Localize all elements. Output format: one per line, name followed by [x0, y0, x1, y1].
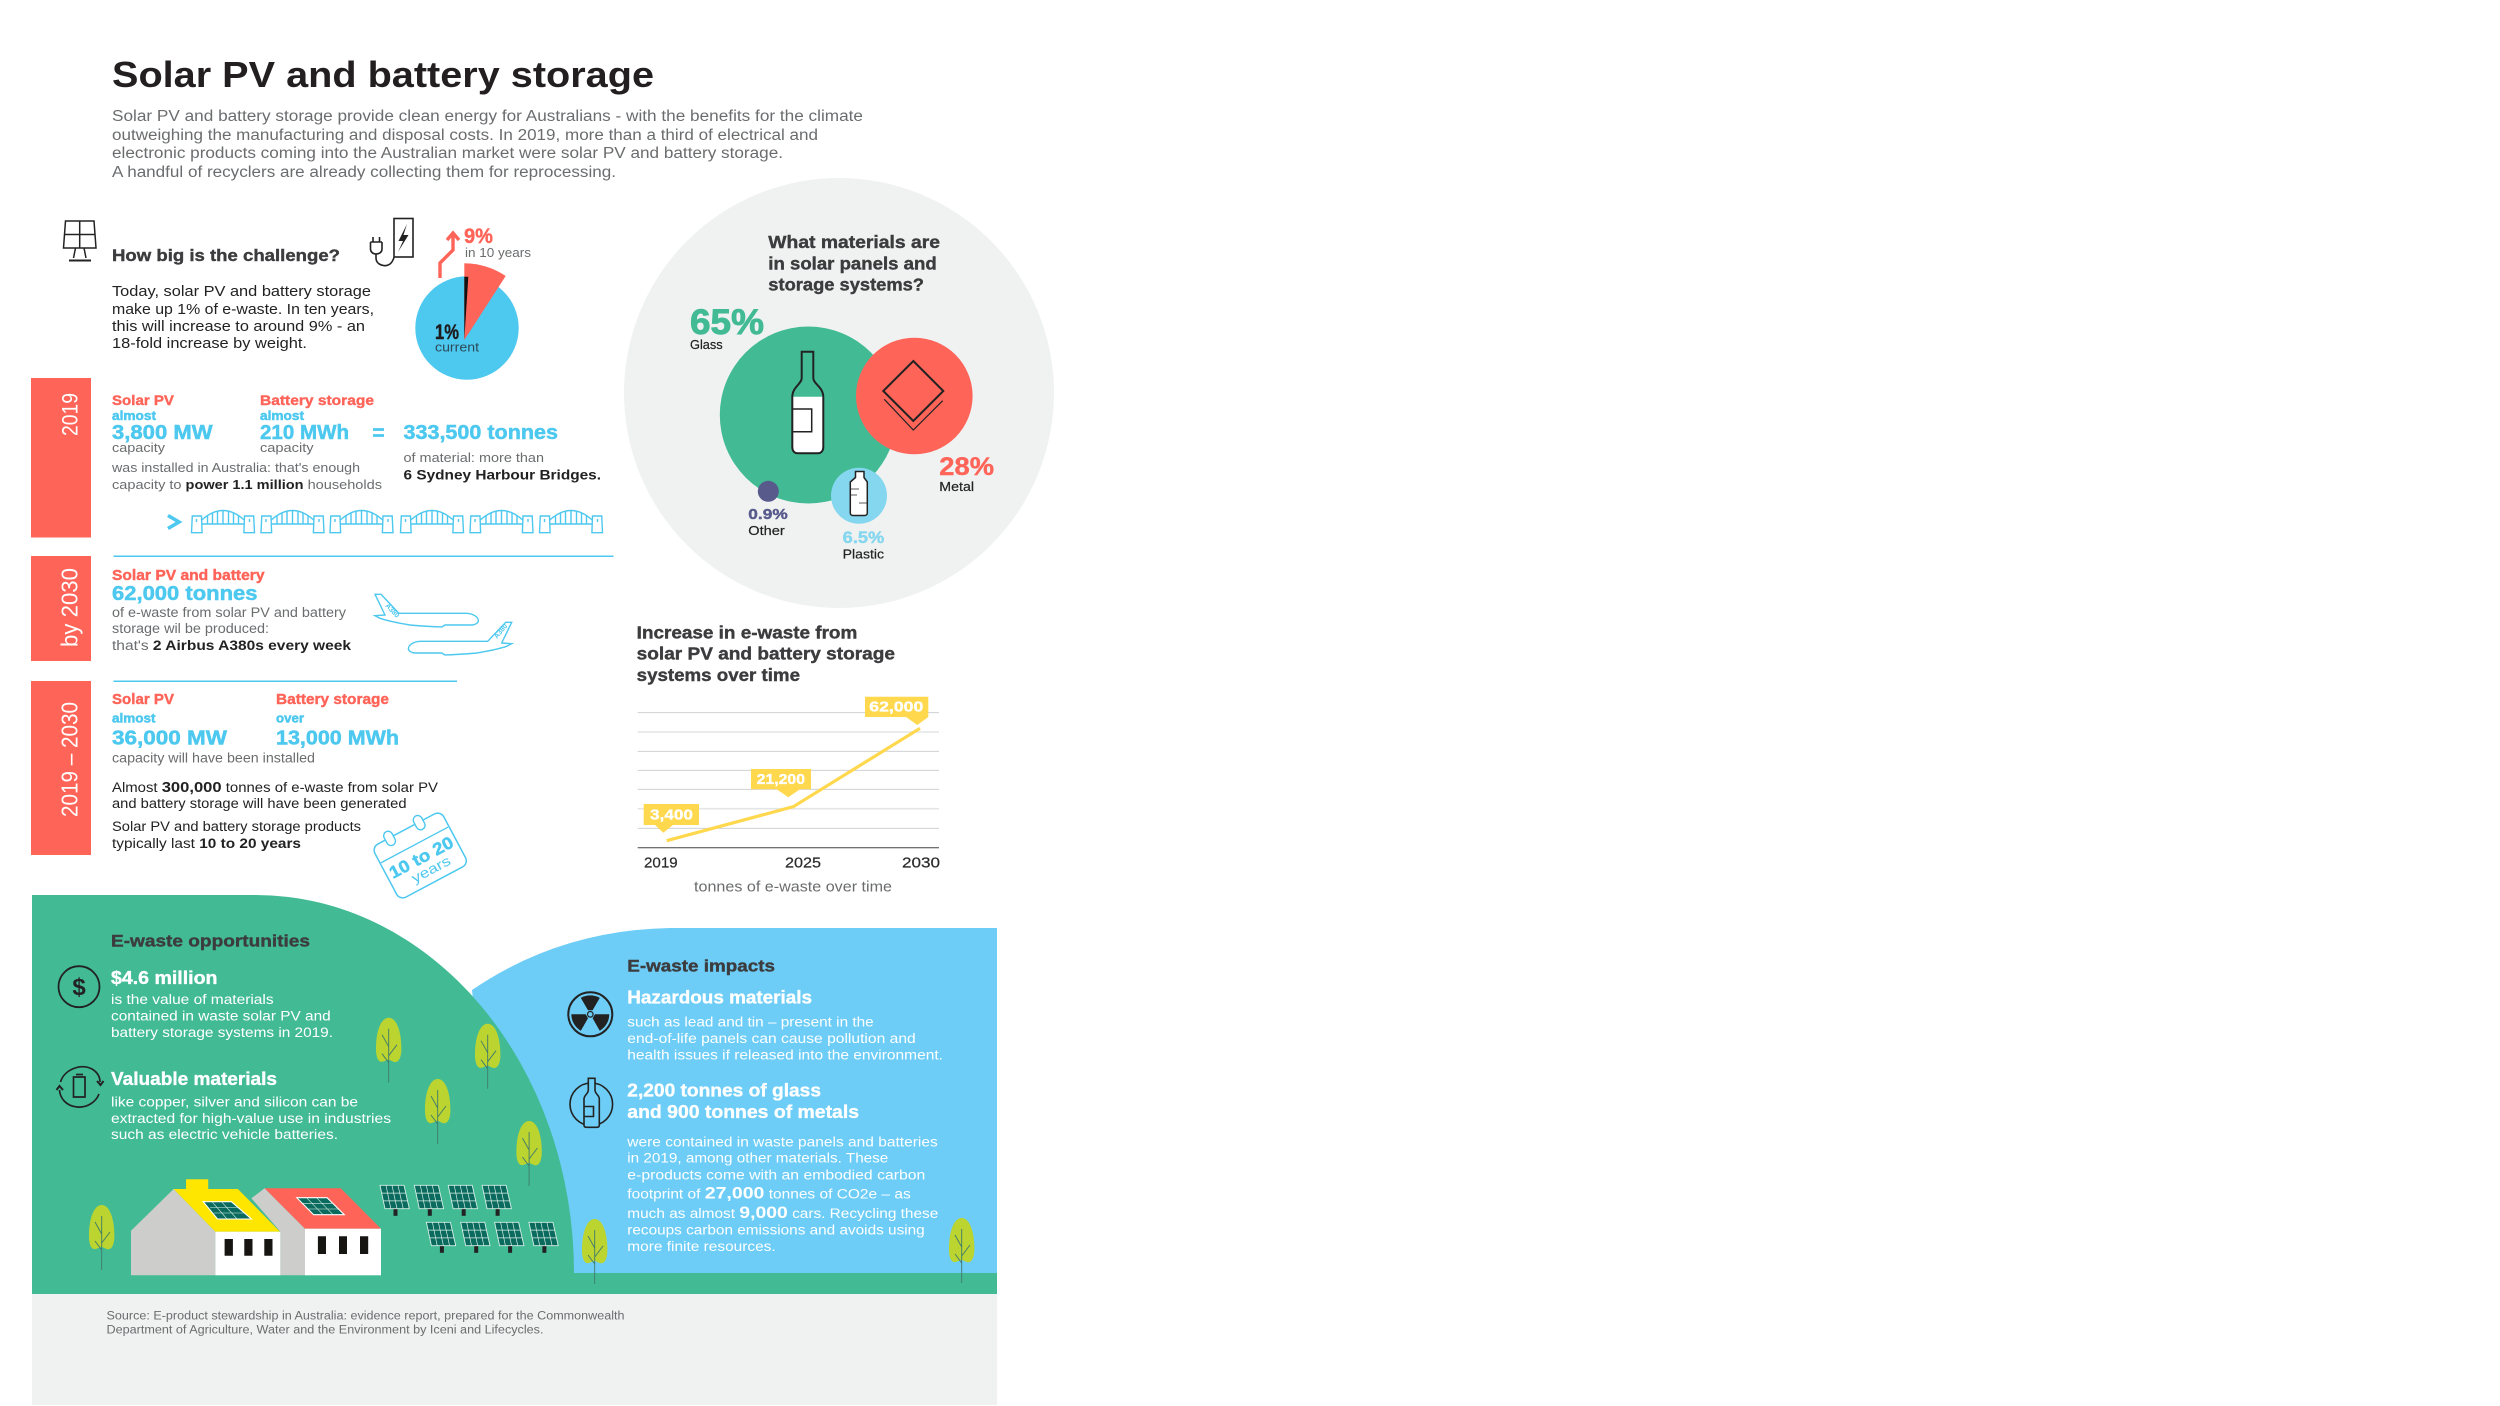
- heading: what materials: storage systems?: [768, 275, 924, 295]
- battery storage 2019 stats: almost: [260, 408, 305, 423]
- e-waste generated note: Almost 300,000 tonnes of e-waste from solar PV: [112, 779, 438, 796]
- battery storage 2019-2030 stats: 13,000 MWh: [276, 728, 399, 750]
- x axis caption: tonnes of e-waste over time: [694, 880, 892, 896]
- year tab: 2019: 2019: [58, 393, 82, 436]
- icon: recycle battery: [56, 1067, 104, 1107]
- panel: materials: [624, 178, 1054, 608]
- hazardous materials text: end-of-life panels can cause pollution and: [627, 1031, 916, 1046]
- total tonnes 2019: [404, 422, 601, 483]
- e-waste generated note: [112, 779, 438, 811]
- solar PV 2019-2030 stats: 36,000 MW: [112, 728, 227, 750]
- label: 9% in 10 years: in 10 years: [465, 245, 532, 260]
- icon: plug and battery: [370, 218, 413, 266]
- total tonnes 2019: 6 Sydney Harbour Bridges.: [404, 467, 601, 483]
- trees: [89, 1018, 974, 1284]
- solar PV 2019-2030 stats: Solar PV: [112, 692, 174, 708]
- plastic circle with bottle: [831, 468, 887, 524]
- valuable materials text: extracted for high-value use in industries: [111, 1111, 391, 1126]
- heading: e-waste opportunities: E-waste opportunities: [111, 932, 310, 951]
- pie chart: 1% current and 9% in 10 years: 1%: [435, 321, 459, 344]
- label: 28% metal: 28%: [939, 453, 994, 481]
- heading: how big is the challenge: How big is the challenge?: [112, 246, 340, 265]
- heading: what materials: What materials are: [768, 232, 940, 252]
- total tonnes 2019: of material: more than: [404, 450, 544, 465]
- year tab: by 2030: [31, 556, 91, 661]
- installation note: capacity to power 1.1 million households: [112, 477, 383, 492]
- other circle: [758, 481, 779, 502]
- battery storage 2019 stats: capacity: [260, 440, 314, 455]
- x axis labels: 2025: [785, 855, 821, 871]
- by 2030 stats: 62,000 tonnes: [112, 583, 258, 605]
- icon: two Airbus A380 planes: [375, 594, 512, 655]
- label: 6.5% plastic: [843, 528, 885, 562]
- label: 0.9% other: 0.9%: [748, 506, 788, 523]
- battery storage 2019-2030 stats: over: [276, 711, 304, 726]
- glass and metals text: recoups carbon emissions and avoids using: [627, 1223, 925, 1238]
- callout: 3,400: 3,400: [650, 806, 693, 823]
- battery storage 2019 stats: 210 MWh: [260, 422, 349, 444]
- source text: Source: E-product stewardship in Australia: evidence report, prepared for the Commonwealth: [106, 1310, 624, 1322]
- by 2030 stats: of e-waste from solar PV and battery: [112, 605, 346, 620]
- label: 28% metal: Metal: [939, 479, 974, 494]
- icon: two Airbus A380 planes: A380: [384, 603, 400, 620]
- metal circle with sheets icon: [856, 338, 973, 454]
- icon: radiation hazard: [568, 992, 612, 1036]
- icon: solar panel: [64, 221, 96, 260]
- by 2030 stats: Solar PV and battery: [112, 568, 264, 584]
- glass and metals text: much as almost 9,000 cars. Recycling these: [627, 1203, 938, 1222]
- glass and metals text: in 2019, among other materials. These: [627, 1151, 888, 1166]
- callout: 62,000: 62,000: [869, 699, 923, 716]
- title: Solar PV and battery storage: [112, 54, 654, 95]
- icon: two Airbus A380 planes: A380: [493, 623, 509, 640]
- callout: 21,200: 21,200: [757, 771, 805, 788]
- panel: by 2030: [31, 556, 512, 661]
- label: 9% in 10 years: 9%: [464, 225, 493, 248]
- value of materials text: battery storage systems in 2019.: [111, 1025, 333, 1040]
- arrow: increase: [440, 233, 459, 278]
- solar PV 2019 stats: Solar PV: [112, 392, 175, 408]
- challenge description: 18-fold increase by weight.: [112, 336, 307, 352]
- source text: Department of Agriculture, Water and the Environment by Iceni and Lifecycles.: [106, 1324, 544, 1336]
- panel: line chart: [637, 622, 940, 896]
- icon: calendar 10 to 20 years: [368, 805, 469, 900]
- solar PV 2019 stats: capacity: [112, 440, 166, 455]
- intro text block: Solar PV and battery storage provide clean energy for Australians - with the benefits for the climate: [112, 108, 863, 125]
- product lifetime note: typically last 10 to 20 years: [112, 836, 301, 851]
- icon: dollar: [58, 966, 100, 1007]
- data line: [667, 728, 920, 841]
- solar PV 2019 stats: 3,800 MW: [112, 422, 213, 444]
- challenge description: [112, 284, 374, 352]
- label: 0.9% other: [748, 506, 788, 538]
- glass and metals text: and 900 tonnes of metals: [627, 1102, 859, 1122]
- total tonnes 2019: 333,500 tonnes: [404, 422, 558, 444]
- hazardous materials text: health issues if released into the environment.: [627, 1047, 943, 1062]
- panel: 2019 to 2030: [31, 681, 469, 900]
- challenge description: this will increase to around 9% - an: [112, 319, 365, 335]
- intro text block: outweighing the manufacturing and disposal costs. In 2019, more than a third of electrical and: [112, 127, 818, 144]
- label: 6.5% plastic: 6.5%: [843, 528, 884, 547]
- panel: source footer: [32, 1294, 997, 1405]
- glass and metals text: more finite resources.: [627, 1239, 776, 1254]
- panel: 2019: [31, 378, 602, 538]
- intro text block: A handful of recyclers are already collecting them for reprocessing.: [112, 164, 616, 181]
- label: 28% metal: [939, 453, 994, 494]
- battery storage 2019 stats: Battery storage: [260, 392, 374, 408]
- label: 0.9% other: Other: [748, 523, 785, 538]
- heading: what materials: [768, 232, 940, 295]
- value of materials text: is the value of materials: [111, 992, 274, 1007]
- product lifetime note: [112, 819, 361, 851]
- value of materials text: contained in waste solar PV and: [111, 1009, 331, 1024]
- blue background: [472, 928, 997, 1273]
- icon: dollar: $: [72, 974, 86, 1001]
- heading: increase in e-waste: systems over time: [637, 665, 800, 685]
- background circle: [624, 178, 1054, 608]
- valuable materials text: such as electric vehicle batteries.: [111, 1127, 338, 1142]
- panel: how big is the challenge: [64, 218, 532, 380]
- solar PV 2019 stats: [112, 392, 213, 455]
- green background: [32, 895, 997, 1294]
- solar PV 2019-2030 stats: [112, 692, 227, 750]
- icon: bottle in circle: [570, 1078, 613, 1127]
- value of materials text: [111, 968, 333, 1040]
- ground solar panels: [380, 1185, 558, 1253]
- glass and metals text: e-products come with an embodied carbon: [627, 1167, 925, 1182]
- icon: calendar 10 to 20 years: 10 to 20: [386, 833, 457, 883]
- capacity note: capacity will have been installed: [112, 751, 315, 766]
- label: 65% glass: 65%: [690, 303, 764, 342]
- panel: e-waste opportunities: [32, 895, 997, 1294]
- hazardous materials text: such as lead and tin – present in the: [627, 1015, 874, 1030]
- label: 9% in 10 years: [464, 225, 532, 260]
- year tab: 2019 to 2030: [31, 681, 91, 855]
- battery storage 2019-2030 stats: Battery storage: [276, 692, 389, 708]
- hazardous materials text: [627, 988, 943, 1062]
- callout: 21,200: [751, 769, 811, 797]
- valuable materials text: like copper, silver and silicon can be: [111, 1095, 358, 1110]
- equals sign: [373, 430, 384, 436]
- heading: increase in e-waste: [637, 622, 895, 685]
- e-waste generated note: and battery storage will have been generated: [112, 796, 406, 811]
- solar PV 2019-2030 stats: almost: [112, 711, 156, 726]
- pie chart: 1% current and 9% in 10 years: current: [435, 340, 479, 355]
- by 2030 stats: [112, 568, 352, 653]
- heading: what materials: in solar panels and: [768, 253, 937, 273]
- glass and metals text: were contained in waste panels and batteries: [626, 1134, 938, 1149]
- callout: 3,400: [644, 804, 699, 833]
- year tab: by 2030: by 2030: [56, 568, 82, 647]
- glass and metals text: footprint of 27,000 tonnes of CO2e – as: [627, 1183, 911, 1202]
- heading: increase in e-waste: solar PV and battery storage: [637, 644, 895, 664]
- hazardous materials text: Hazardous materials: [627, 988, 812, 1008]
- glass and metals text: [626, 1081, 938, 1254]
- glass circle with bottle: [720, 326, 897, 504]
- by 2030 stats: that's 2 Airbus A380s every week: [112, 638, 352, 653]
- pie chart: 1% current and 9% in 10 years: [415, 263, 519, 380]
- label: 6.5% plastic: Plastic: [843, 547, 885, 562]
- x axis labels: 2019: [644, 855, 678, 871]
- value of materials text: $4.6 million: [111, 968, 218, 988]
- intro text block: electronic products coming into the Australian market were solar PV and battery storage.: [112, 145, 783, 162]
- valuable materials text: [111, 1069, 391, 1142]
- product lifetime note: Solar PV and battery storage products: [112, 819, 361, 834]
- x axis labels: 2030: [902, 855, 940, 871]
- challenge description: Today, solar PV and battery storage: [112, 284, 371, 300]
- icon: calendar 10 to 20 years: years: [409, 852, 453, 886]
- house with yellow roof: [131, 1179, 280, 1275]
- solar PV 2019 stats: almost: [112, 408, 157, 423]
- year tab: 2019: [31, 378, 91, 538]
- icon: six Sydney Harbour Bridges: [192, 510, 602, 533]
- house with coral roof: [251, 1188, 381, 1275]
- installation note: [111, 460, 383, 492]
- x axis labels: [644, 855, 940, 871]
- label: 65% glass: Glass: [690, 337, 723, 352]
- challenge description: make up 1% of e-waste. In ten years,: [112, 302, 374, 318]
- battery storage 2019-2030 stats: [276, 692, 399, 750]
- icon: greater-than sign: [168, 516, 179, 528]
- heading: e-waste impacts: E-waste impacts: [627, 957, 775, 976]
- intro text block: [112, 108, 863, 181]
- year tab: 2019 to 2030: 2019 – 2030: [56, 702, 82, 817]
- installation note: was installed in Australia: that's enough: [111, 460, 360, 475]
- source text: [106, 1310, 624, 1336]
- heading: increase in e-waste: Increase in e-waste from: [637, 622, 857, 642]
- valuable materials text: Valuable materials: [111, 1069, 277, 1089]
- glass and metals text: 2,200 tonnes of glass: [627, 1081, 821, 1101]
- by 2030 stats: storage wil be produced:: [112, 621, 269, 636]
- battery storage 2019 stats: [260, 392, 374, 455]
- callout: 62,000: [865, 697, 928, 725]
- panel: e-waste impacts: [472, 928, 997, 1273]
